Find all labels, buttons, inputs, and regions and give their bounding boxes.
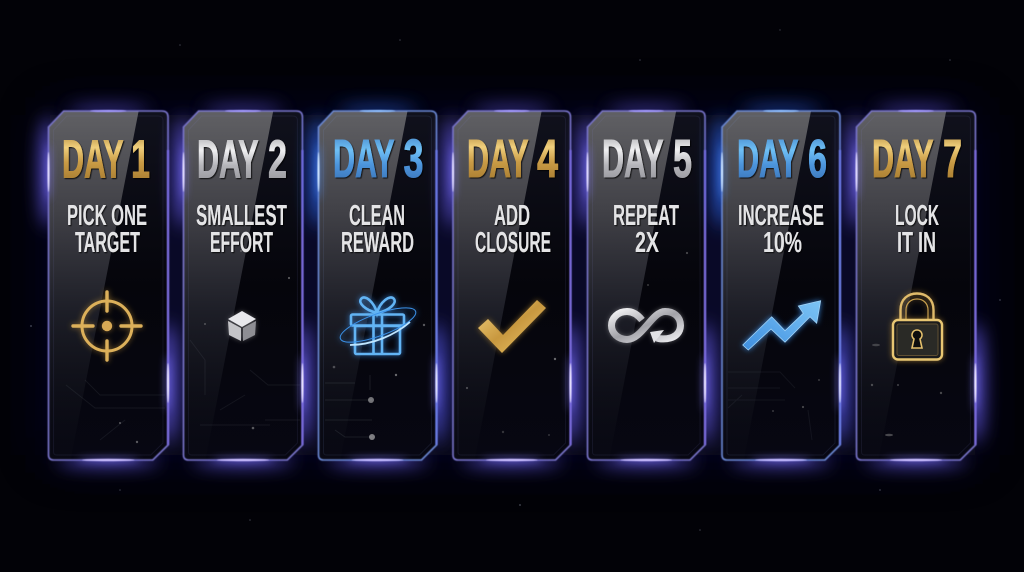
panel: day 6 xyxy=(715,107,847,465)
icon: padlock xyxy=(893,294,942,360)
heading: day 5: 5 xyxy=(673,129,692,189)
icon: cube xyxy=(228,311,256,341)
heading: day 4: 4 xyxy=(537,129,558,189)
heading: day 2: 2 xyxy=(268,130,287,190)
text: repeat 2x: REPEAT xyxy=(613,200,679,232)
text: smallest effort xyxy=(196,200,287,259)
text: add closure: ADD xyxy=(494,200,530,232)
text: add closure: CLOSURE xyxy=(475,227,551,259)
panel: day 7 xyxy=(849,107,982,465)
text: increase 10%: INCREASE xyxy=(738,200,824,232)
heading: day 7: DAY xyxy=(872,129,934,189)
text: smallest effort: EFFORT xyxy=(210,227,273,259)
icon: check mark xyxy=(478,300,546,353)
text: repeat 2x xyxy=(613,200,679,259)
heading: day 3: DAY xyxy=(333,129,395,189)
text: pick one target: PICK ONE xyxy=(67,200,147,232)
heading: day 7: 7 xyxy=(943,129,962,189)
text: increase 10%: 10% xyxy=(763,227,802,259)
heading: day 5: DAY xyxy=(602,129,664,189)
text: lock it in: IT IN xyxy=(897,227,936,259)
heading: day 1: 1 xyxy=(131,130,150,190)
text: lock it in: LOCK xyxy=(895,200,939,232)
text: pick one target: TARGET xyxy=(75,227,140,259)
icon: crosshair target xyxy=(73,292,141,360)
heading: day 1: DAY xyxy=(62,130,124,190)
heading: day 3: 3 xyxy=(404,129,424,189)
text: lock it in xyxy=(895,200,939,259)
text: clean reward: REWARD xyxy=(341,227,414,259)
heading: day 4: DAY xyxy=(467,129,529,189)
panel: day 3 xyxy=(312,107,444,465)
icon: gift box xyxy=(337,297,419,354)
panel: day 1 xyxy=(41,107,175,465)
text: pick one target xyxy=(67,200,147,259)
panel: day 4 xyxy=(446,107,578,465)
icon: infinity loop xyxy=(612,312,680,343)
text: repeat 2x: 2X xyxy=(635,227,659,259)
text: add closure xyxy=(475,200,551,259)
panel: day 2 xyxy=(176,107,310,465)
heading: day 6: 6 xyxy=(808,129,827,189)
heading: day 6: DAY xyxy=(737,129,799,189)
text: clean reward xyxy=(341,200,414,259)
panel: day 5 xyxy=(581,107,712,465)
text: increase 10% xyxy=(738,200,824,259)
heading: day 2: DAY xyxy=(197,130,259,190)
icon: rising arrow xyxy=(743,301,821,350)
text: clean reward: CLEAN xyxy=(349,200,405,232)
text: smallest effort: SMALLEST xyxy=(196,200,287,232)
